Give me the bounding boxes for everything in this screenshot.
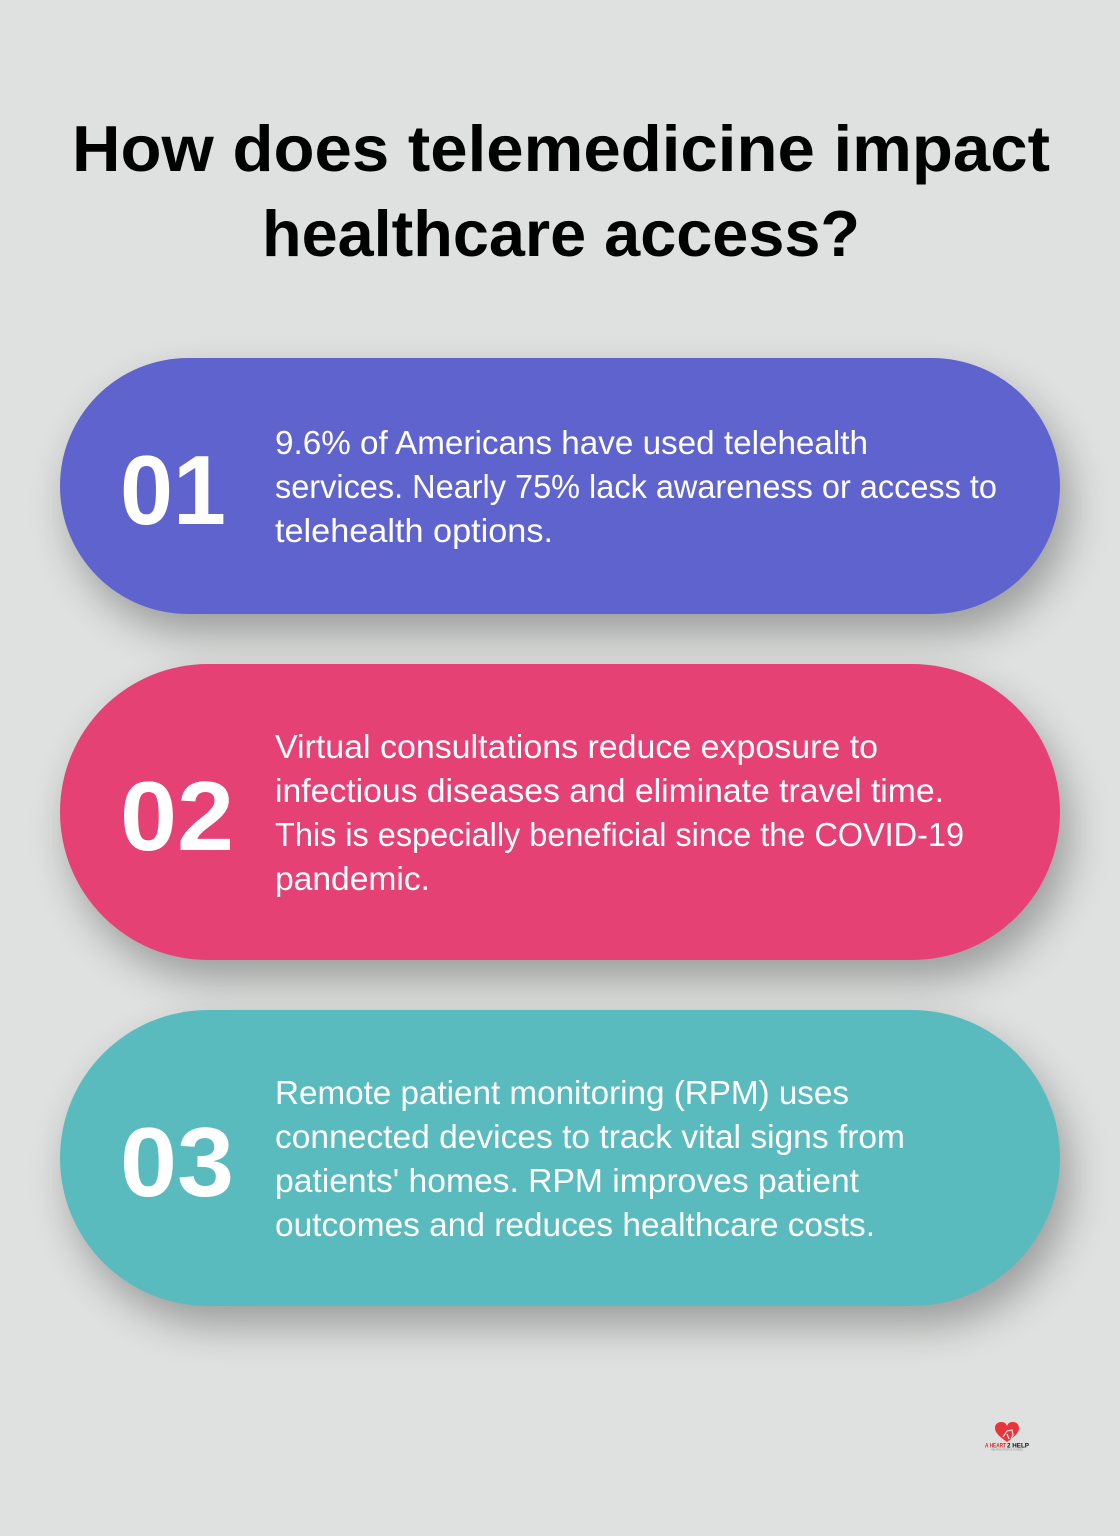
text block: card 03: connected devices to track vital signs from	[275, 1118, 905, 1155]
title: healthcare access?	[262, 197, 860, 270]
icon: A Heart 2 Help logo	[985, 1422, 1029, 1452]
text block: card 03	[275, 1074, 905, 1243]
text block: card 03: outcomes and reduces healthcare costs.	[275, 1206, 875, 1243]
icon: A Heart 2 Help logo: HELPING PEOPLE IN NEED	[991, 1448, 1023, 1452]
icon: A Heart 2 Help logo: A HEART	[985, 1444, 1006, 1450]
text block: card 02: pandemic.	[275, 860, 430, 897]
text block: card 01: telehealth options.	[275, 512, 553, 549]
text block: card 03: patients' homes. RPM improves patient	[275, 1162, 859, 1199]
number 02: 02	[120, 761, 234, 871]
title: How does telemedicine impact	[72, 112, 1050, 185]
panel: card 01 background	[60, 358, 1060, 614]
text block: card 02: infectious diseases and eliminate travel time.	[275, 772, 944, 809]
text block: card 01	[275, 424, 997, 549]
text block: card 02	[275, 728, 964, 897]
panel: card 02 background	[60, 664, 1060, 960]
title	[72, 112, 1050, 270]
text block: card 02: This is especially beneficial since the COVID-19	[275, 816, 964, 853]
number 03: 03	[120, 1107, 234, 1217]
text block: card 01: 9.6% of Americans have used telehealth	[275, 424, 868, 461]
text block: card 01: services. Nearly 75% lack awareness or access to	[275, 468, 997, 505]
text block: card 03: Remote patient monitoring (RPM) uses	[275, 1074, 849, 1111]
icon: A Heart 2 Help logo: 2 HELP	[1007, 1444, 1029, 1450]
text block: card 02: Virtual consultations reduce exposure to	[275, 728, 878, 765]
panel: card 03 background	[60, 1010, 1060, 1306]
number 01: 01	[120, 435, 226, 545]
